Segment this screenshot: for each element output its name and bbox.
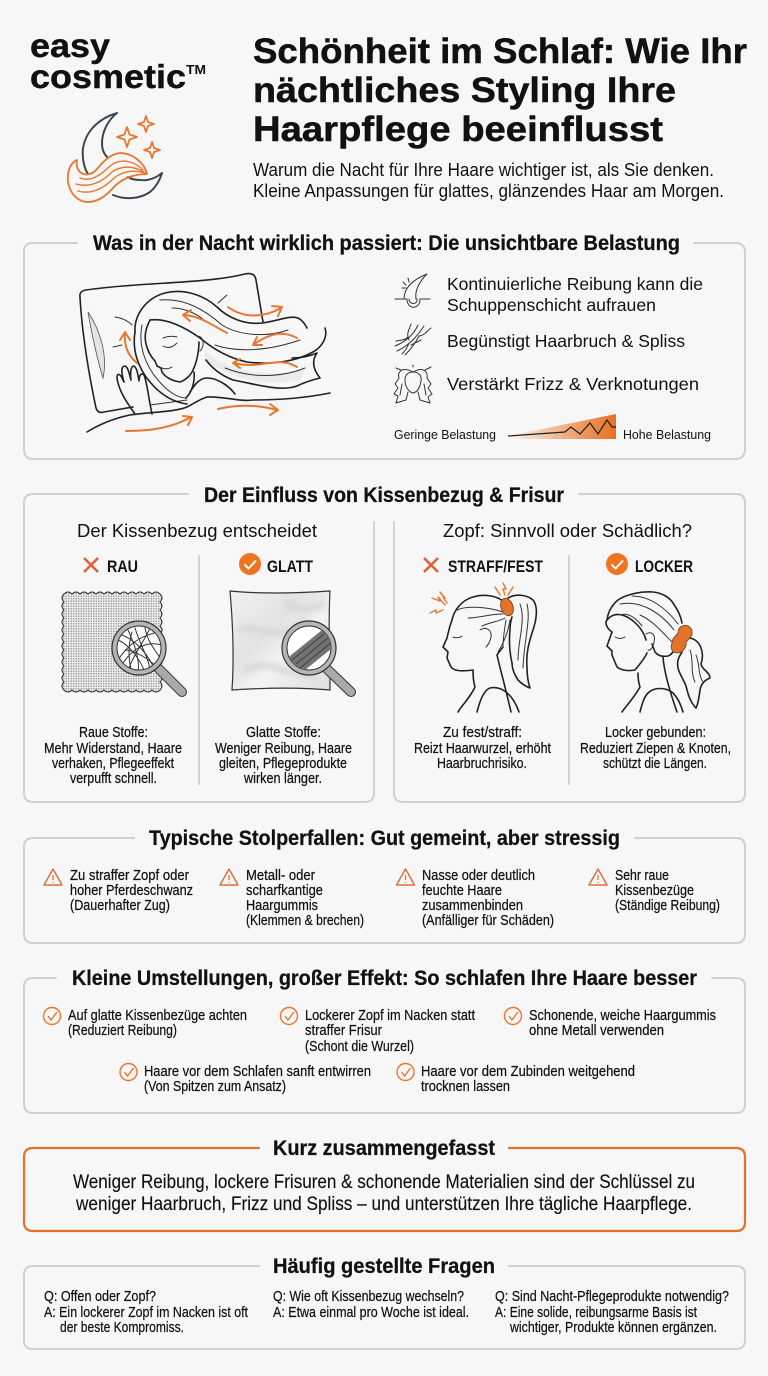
illustration: sleeping woman: [80, 274, 330, 432]
caption: zu fest: Reizt Haarwurzel, erhöht: [414, 741, 551, 757]
tip 4: [120, 1064, 371, 1095]
heading: stolperfallen: Typische Stolperfallen: Gut gemeint, aber stressig: [149, 827, 620, 850]
text: zusammenfassung: [73, 1172, 695, 1215]
faq 2: A: Etwa einmal pro Woche ist ideal.: [273, 1305, 469, 1321]
text: zusammenfassung: weniger Haarbruch, Frizz und Spliss – und unterstützen Ihre tägliche Haarpflege.: [75, 1194, 692, 1215]
faq 3: [495, 1289, 729, 1336]
logo wordmark: TM: [186, 62, 206, 77]
logo wordmark: cosmetic: [30, 58, 186, 95]
pitfall 3: zusammenbinden: [422, 898, 523, 914]
text: zusammenfassung: Weniger Reibung, lockere Frisuren & schonende Materialien sind der Schlüssel zu: [73, 1172, 695, 1193]
caption: glatte stoffe: [215, 725, 352, 787]
faq 2: [273, 1289, 469, 1321]
tip 3: [504, 1008, 716, 1039]
tip 2: [280, 1008, 475, 1055]
caption: locker gebunden: Locker gebunden:: [605, 725, 706, 741]
pitfall 2: (Klemmen & brechen): [246, 913, 364, 929]
subtitle: Kleine Anpassungen für glattes, glänzendes Haar am Morgen.: [253, 181, 724, 201]
icon: split hair: [395, 324, 431, 355]
faq 1: Q: Offen oder Zopf?: [44, 1289, 156, 1305]
caption: zu fest: Haarbruchrisiko.: [437, 756, 527, 772]
heading: faq: Häufig gestellte Fragen: [273, 1255, 495, 1278]
label: rau: [84, 557, 138, 576]
tip 1: [44, 1008, 247, 1039]
panel: typische stolperfallen: [24, 827, 745, 943]
legend: belastung scale: Geringe Belastung: [394, 428, 496, 442]
tip 4: (Von Spitzen zum Ansatz): [144, 1079, 286, 1095]
text: reibung: Kontinuierliche Reibung kann die: [447, 274, 703, 294]
arrows: friction: [120, 306, 297, 431]
illustration: tight ponytail: [430, 583, 536, 712]
caption: raue stoffe: verhaken, Pflegeeffekt: [52, 756, 174, 772]
subheading: kissenbezug: Der Kissenbezug entscheidet: [77, 520, 317, 541]
pitfall 2: [220, 868, 364, 929]
heading: einfluss: Der Einfluss von Kissenbezug & Frisur: [204, 484, 564, 507]
icon: frizzy hair: [394, 365, 432, 403]
pitfall 4: (Ständige Reibung): [615, 898, 720, 914]
caption: zu fest: Zu fest/straff:: [443, 725, 522, 741]
pitfall 1: Zu straffer Zopf oder: [70, 868, 189, 884]
logo wordmark: easy: [30, 27, 111, 64]
caption: raue stoffe: verpufft schnell.: [70, 771, 157, 787]
label: glatt: [239, 553, 313, 576]
faq 1: der beste Kompromiss.: [60, 1320, 184, 1336]
label: rau: RAU: [107, 557, 138, 576]
caption: glatte stoffe: wirken länger.: [243, 771, 322, 787]
illustration: smooth silk under magnifier: [230, 591, 351, 692]
tip 5: Haare vor dem Zubinden weitgehend: [421, 1064, 635, 1080]
illustration: rough fabric under magnifier: [62, 592, 182, 692]
panel frame left: [24, 494, 374, 802]
panel: kleine umstellungen: [24, 967, 745, 1113]
tip 4: Haare vor dem Schlafen sanft entwirren: [144, 1064, 371, 1080]
title: Haarpflege beeinflusst: [253, 110, 663, 149]
text: haarbruch: Begünstigt Haarbruch & Spliss: [447, 331, 685, 351]
heading: unsichtbare belastung: Was in der Nacht wirklich passiert: Die unsichtbare Belastung: [93, 232, 680, 255]
subheading: zopf: Zopf: Sinnvoll oder Schädlich?: [443, 520, 692, 541]
caption: raue stoffe: Mehr Widerstand, Haare: [44, 741, 182, 757]
caption: locker gebunden: Reduziert Ziepen & Knoten,: [580, 741, 731, 757]
panel: kissenbezug und frisur: [24, 484, 745, 802]
label: locker: LOCKER: [635, 557, 693, 576]
faq 3: wichtiger, Produkte können ergänzen.: [509, 1320, 717, 1336]
pitfall 3: feuchte Haare: [422, 883, 502, 899]
tip 2: (Schont die Wurzel): [305, 1039, 414, 1055]
panel frame right: [394, 494, 745, 802]
panel: kurz zusammengefasst: [24, 1137, 745, 1231]
tip 3: Schonende, weiche Haargummis: [529, 1008, 716, 1024]
caption: glatte stoffe: gleiten, Pflegeprodukte: [219, 756, 347, 772]
panel: faq: [24, 1255, 745, 1349]
title: nächtliches Styling Ihre: [253, 71, 676, 110]
faq 1: [44, 1289, 248, 1336]
faq 3: Q: Sind Nacht-Pflegeprodukte notwendig?: [495, 1289, 729, 1305]
pitfall 2: Metall- oder: [246, 868, 315, 884]
pitfall 2: scharfkantige: [246, 883, 323, 899]
pitfall 4: Kissenbezüge: [615, 883, 694, 899]
tip 5: trocknen lassen: [421, 1079, 510, 1095]
subtitle: [253, 160, 724, 201]
caption: zu fest: [414, 725, 551, 772]
title: [253, 32, 747, 149]
pitfall 2: Haargummis: [246, 898, 318, 914]
tip 2: straffer Frisur: [305, 1023, 382, 1039]
pitfall 3: Nasse oder deutlich: [422, 868, 535, 884]
text: reibung: [447, 274, 703, 315]
icon: hair follicle: [395, 274, 430, 307]
caption: glatte stoffe: Glatte Stoffe:: [246, 725, 321, 741]
pitfall 4: [589, 868, 720, 914]
caption: raue stoffe: Raue Stoffe:: [79, 725, 148, 741]
faq 3: A: Eine solide, reibungsarme Basis ist: [495, 1305, 697, 1321]
pitfall 4: Sehr raue: [615, 868, 669, 884]
icon: moon, stars and hair wave: [68, 113, 162, 202]
text: reibung: Schuppenschicht aufrauen: [447, 295, 656, 315]
heading: zusammenfassung: Kurz zusammengefasst: [273, 1137, 495, 1160]
brand logo: [30, 27, 206, 202]
label: locker: [606, 553, 693, 576]
label: straff: [424, 557, 544, 576]
title: Schönheit im Schlaf: Wie Ihr: [253, 32, 747, 71]
legend: belastung scale: [394, 414, 711, 442]
tip 1: Auf glatte Kissenbezüge achten: [68, 1008, 247, 1024]
pitfall 3: (Anfälliger für Schäden): [422, 913, 554, 929]
faq 2: Q: Wie oft Kissenbezug wechseln?: [273, 1289, 464, 1305]
tip 3: ohne Metall verwenden: [529, 1023, 664, 1039]
heading: umstellungen: Kleine Umstellungen, großer Effekt: So schlafen Ihre Haare besser: [72, 967, 697, 990]
panel: was in der nacht passiert: [24, 232, 745, 459]
logo wordmark: [30, 27, 206, 95]
tip 2: Lockerer Zopf im Nacken statt: [305, 1008, 475, 1024]
pitfall 1: (Dauerhafter Zug): [70, 898, 170, 914]
pitfall 3: [396, 868, 554, 929]
caption: locker gebunden: [580, 725, 731, 772]
label: glatt: GLATT: [267, 557, 313, 576]
legend: belastung scale: Hohe Belastung: [623, 428, 711, 442]
icon: pain sparks: [430, 583, 513, 613]
subtitle: Warum die Nacht für Ihre Haare wichtiger ist, als Sie denken.: [253, 160, 714, 180]
tip 1: (Reduziert Reibung): [68, 1023, 177, 1039]
illustration: loose ponytail: [606, 592, 710, 712]
caption: locker gebunden: schützt die Längen.: [603, 756, 707, 772]
list: effects: [394, 274, 703, 403]
caption: raue stoffe: [44, 725, 182, 787]
label: straff: STRAFF/FEST: [448, 557, 544, 576]
caption: glatte stoffe: Weniger Reibung, Haare: [215, 741, 352, 757]
tip 5: [397, 1064, 635, 1095]
pitfall 1: hoher Pferdeschwanz: [70, 883, 193, 899]
faq 1: A: Ein lockerer Zopf im Nacken ist oft: [44, 1305, 248, 1321]
text: frizz: Verstärkt Frizz & Verknotungen: [447, 374, 699, 394]
pitfall 1: [44, 868, 193, 914]
